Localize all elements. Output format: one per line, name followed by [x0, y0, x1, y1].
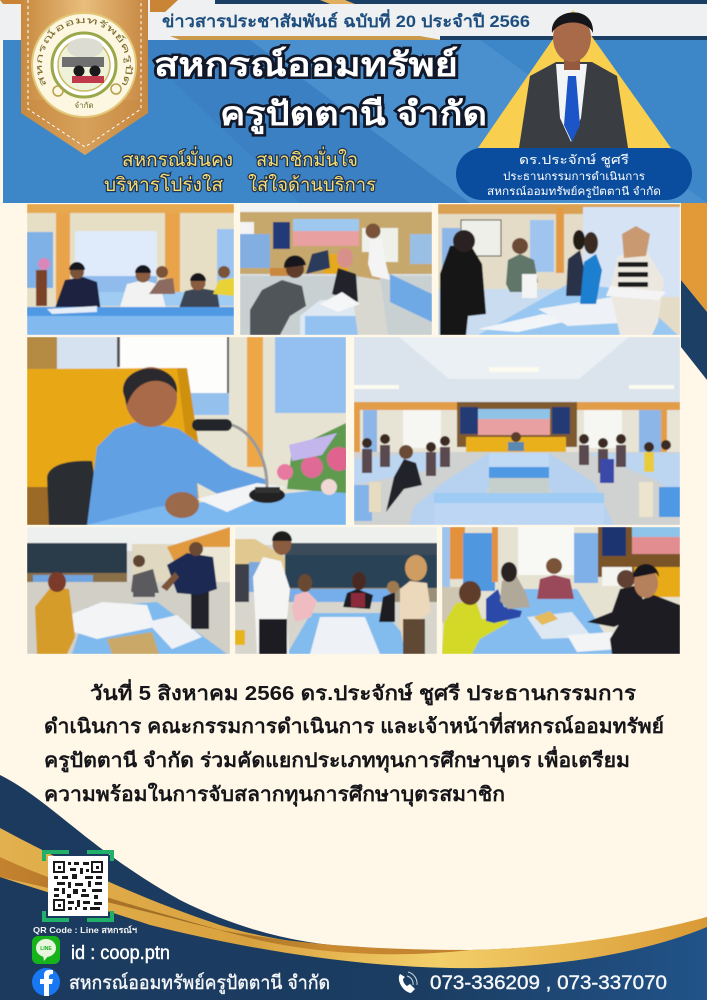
- body paragraph: [44, 678, 664, 807]
- icon: phone: [399, 972, 417, 993]
- main title: สหกรณ์ออมทรัพย์: [154, 46, 458, 83]
- photo: staff standing at document table: [235, 527, 437, 654]
- chairman name plate: สหกรณ์ออมทรัพย์ครูปัตตานี จำกัด: [487, 185, 661, 198]
- photo: staff sorting documents: [240, 204, 432, 335]
- chairman portrait: [478, 10, 671, 148]
- photo: group discussion at table: [442, 527, 680, 654]
- QR caption: QR Code : Line สหกรณ์ฯ: [33, 925, 137, 935]
- footer curved background: [0, 775, 707, 1000]
- header blue banner: [3, 40, 707, 203]
- photo: staff in hall sorting files: [27, 527, 230, 654]
- body paragraph: ความพร้อมในการจับสลากทุนการศึกษาบุตรสมาชิก: [44, 782, 505, 807]
- photo: meeting room overview: [354, 337, 680, 525]
- slogan: ใส่ใจด้านบริการ: [248, 174, 376, 196]
- chairman name plate: ดร.ประจักษ์ ชูศรี: [519, 153, 629, 168]
- header top strip: [0, 0, 707, 40]
- header title: newsletter issue: ข่าวสารประชาสัมพันธ์ ฉบับที่ 20 ประจำปี 2566: [162, 9, 530, 31]
- body paragraph: วันที่ 5 สิงหาคม 2566 ดร.ประจักษ์ ชูศรี ประธานกรรมการ: [90, 678, 636, 707]
- photo: staff checking papers: [438, 204, 680, 335]
- slogan: บริหารโปร่งใส: [104, 173, 223, 196]
- icon: Facebook: [32, 968, 60, 996]
- QR code: [44, 852, 112, 920]
- chairman name plate: [456, 148, 692, 200]
- logo ribbon with seal: จำกัด: [74, 101, 94, 110]
- logo ribbon with seal: [21, 0, 148, 155]
- right edge chevrons: [681, 203, 707, 380]
- main title: ครูปัตตานี จำกัด: [220, 95, 487, 135]
- photo: chairman speaking at microphone: [27, 337, 346, 525]
- photo: committee seated at table: [27, 204, 234, 335]
- slogan: สมาชิกมั่นใจ: [256, 146, 358, 171]
- phone numbers: 073-336209 , 073-337070: [430, 973, 667, 994]
- slogan: [104, 146, 376, 196]
- body paragraph: ดำเนินการ คณะกรรมการดำเนินการ และเจ้าหน้าที่สหกรณ์ออมทรัพย์: [44, 711, 664, 738]
- main title: [154, 46, 487, 135]
- body paragraph: ครูปัตตานี จำกัด ร่วมคัดแยกประเภททุนการศึกษาบุตร เพื่อเตรียม: [44, 745, 630, 774]
- chairman name plate: ประธานกรรมการดำเนินการ: [503, 171, 645, 183]
- slogan: สหกรณ์มั่นคง: [122, 146, 233, 171]
- Facebook page name: สหกรณ์ออมทรัพย์ครูปัตตานี จำกัด: [69, 972, 330, 994]
- LINE id: id : coop.ptn: [71, 943, 170, 964]
- icon: LINE: [32, 936, 60, 964]
- icon: LINE: LINE: [40, 946, 52, 952]
